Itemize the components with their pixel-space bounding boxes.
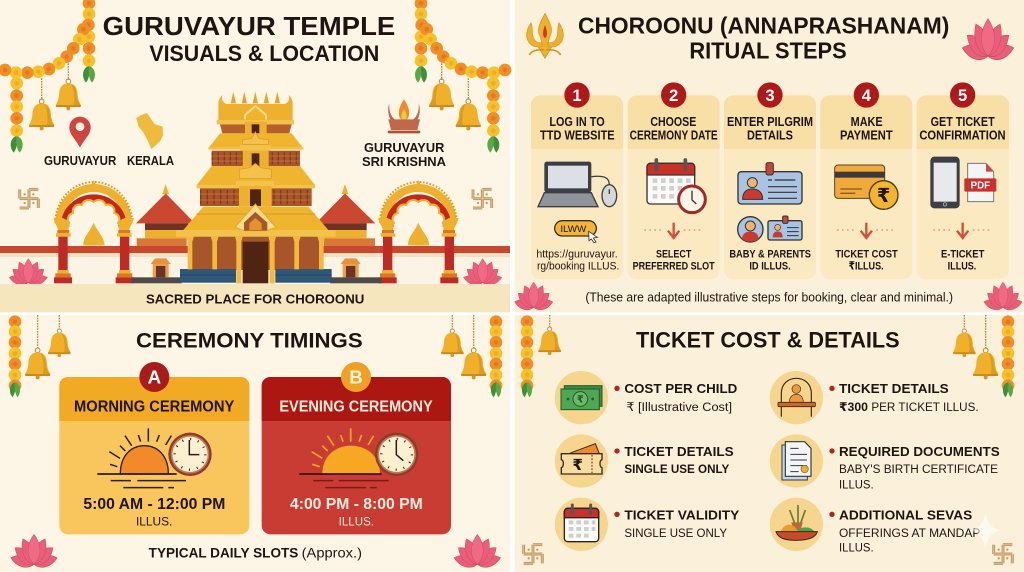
item: cost per child: COST PER CHILD: [624, 381, 738, 396]
icon: credit card with rupee coin: [835, 165, 898, 209]
bells left: [25, 315, 71, 379]
label: Guruvayur Sri Krishna: [362, 141, 446, 169]
label: Guruvayur Sri Krishna: GURUVAYUR: [364, 141, 444, 155]
icon: swastika left: [524, 545, 542, 563]
step card 1: 1: [572, 86, 582, 105]
step card 5: [917, 82, 1009, 279]
side pavilions: [136, 184, 375, 246]
title: TICKET COST & DETAILS: [636, 328, 900, 353]
lotus bottom right: [983, 282, 1023, 312]
panel: ritual steps: [514, 0, 1024, 312]
arch right: [378, 180, 459, 283]
step card 1: LOG IN TO: [549, 115, 605, 129]
icon: calendar with clock: [647, 160, 705, 213]
temple wall band: [0, 246, 510, 284]
icon: swastika right: [994, 545, 1012, 563]
icon: url button: [555, 221, 597, 243]
step card 5: E-TICKET: [941, 248, 984, 260]
lotus right: [463, 259, 503, 287]
label: Guruvayur: GURUVAYUR: [44, 154, 116, 168]
item: cost per child: [555, 371, 738, 424]
item: ticket validity: SINGLE USE ONLY: [624, 526, 727, 540]
title: [103, 11, 395, 66]
step card 1: [531, 82, 623, 279]
step card 3: 3: [765, 86, 775, 105]
arrow: [644, 223, 704, 238]
card: morning ceremony: [59, 362, 249, 534]
title: [578, 12, 949, 64]
card: evening ceremony: EVENING CEREMONY: [279, 399, 433, 416]
item: additional sevas: ILLUS.: [839, 541, 874, 555]
icon: phone and pdf: PDF: [971, 180, 990, 191]
step card 5: ILLUS.: [948, 260, 976, 272]
title: RITUAL STEPS: [689, 38, 847, 64]
caption strip: [0, 284, 510, 312]
icon: baby and parents ids: [738, 216, 802, 242]
caption: TYPICAL DAILY SLOTS: [149, 545, 298, 561]
icon: laptop: [538, 162, 617, 207]
step card 1: https://guruvayur.: [536, 248, 618, 260]
title: GURUVAYUR TEMPLE: [103, 11, 395, 41]
panel: ceremony timings: [0, 315, 510, 572]
label: Kerala: KERALA: [127, 154, 174, 168]
step card 4: TICKET COST: [835, 248, 898, 260]
item: required documents: BABY'S BIRTH CERTIFICATE: [839, 462, 998, 476]
step card 2: SELECT: [656, 248, 691, 260]
lotus left: [8, 259, 48, 287]
step card 5: 5: [958, 86, 967, 105]
caption: (Approx.): [302, 545, 362, 561]
garland left: [521, 315, 533, 397]
step card 5: GET TICKET: [931, 115, 995, 129]
step card 4: 4: [862, 86, 872, 105]
step card 3: ID ILLUS.: [749, 260, 791, 272]
item: ticket details price: [770, 371, 979, 424]
icon: url button: ILWW: [560, 224, 587, 234]
step card 2: CEREMONY DATE: [630, 128, 718, 142]
icon: evening sun and clock: [299, 428, 418, 488]
card: morning ceremony: ILLUS.: [136, 515, 172, 529]
main temple: [176, 92, 336, 283]
item: ticket validity: TICKET VALIDITY: [624, 507, 739, 522]
item: ticket details single use: ₹: [572, 457, 583, 474]
footnote: (These are adapted illustrative steps for booking, clear and minimal.): [585, 291, 953, 305]
card: morning ceremony: 5:00 AM - 12:00 PM: [83, 496, 225, 513]
step card 4: MAKE: [851, 115, 883, 129]
icon: morning sun and clock: [97, 428, 212, 488]
garland left: [9, 315, 21, 397]
lotus top right: [961, 19, 1015, 63]
item: additional sevas: OFFERINGS AT MANDAP: [839, 526, 980, 540]
item: ticket details price: ₹300: [839, 400, 868, 414]
icon: credit card with rupee coin: ₹: [877, 186, 890, 207]
icon: pin centre: [76, 122, 84, 131]
card: morning ceremony: MORNING CEREMONY: [74, 399, 234, 416]
bells left: [29, 63, 81, 130]
step card 3: BABY & PARENTS: [729, 248, 811, 260]
title: CHOROONU (ANNAPRASHANAM): [578, 12, 949, 38]
icon: swastika left: [20, 189, 38, 208]
icon: trishul: [527, 13, 563, 58]
item: cost per child: ₹ [Illustrative Cost]: [626, 400, 732, 414]
card: evening ceremony: ILLUS.: [339, 515, 374, 529]
step card 3: ENTER PILGRIM: [727, 115, 813, 129]
card: morning ceremony: A: [148, 367, 161, 388]
item: additional sevas: [770, 498, 980, 555]
item: ticket details single use: TICKET DETAILS: [624, 444, 734, 459]
step card 4: PAYMENT: [840, 128, 893, 142]
step card 2: [628, 82, 720, 279]
icon: swastika right: [473, 189, 492, 208]
arrow: [933, 223, 993, 238]
item: ticket validity: [555, 498, 739, 551]
step card 3: [724, 82, 816, 279]
icon: Kerala map: [137, 114, 162, 148]
bells right: [953, 315, 998, 379]
step card 2: 2: [669, 86, 678, 105]
lotus left: [10, 534, 58, 570]
item: ticket details price: TICKET DETAILS: [839, 381, 949, 396]
item: ticket details price: PER TICKET ILLUS.: [871, 400, 979, 414]
bells right: [441, 315, 486, 379]
caption strip: SACRED PLACE FOR CHOROONU: [146, 291, 364, 306]
lotus bottom left: [514, 282, 554, 312]
lotus right: [453, 534, 502, 570]
step card 5: CONFIRMATION: [919, 128, 1006, 142]
icon: map pin: [69, 117, 91, 147]
step card 4: [820, 82, 912, 279]
card: evening ceremony: 4:00 PM - 8:00 PM: [290, 496, 423, 513]
item: additional sevas: ADDITIONAL SEVAS: [839, 507, 972, 522]
garland left: [0, 0, 95, 153]
small shrines: [132, 258, 382, 283]
bell left: [538, 315, 561, 355]
item: ticket details single use: SINGLE USE ONLY: [624, 462, 729, 476]
title: VISUALS & LOCATION: [149, 41, 379, 66]
item: cost per child: ₹: [577, 395, 584, 406]
arch left: [53, 180, 134, 283]
item: required documents: REQUIRED DOCUMENTS: [839, 444, 1000, 459]
garland and bells right: [415, 0, 511, 153]
garland right: [490, 315, 502, 397]
step card 4: ₹ILLUS.: [849, 260, 884, 272]
card: evening ceremony: B: [349, 367, 363, 388]
title: CEREMONY TIMINGS: [136, 329, 363, 353]
step card 2: CHOOSE: [650, 115, 696, 129]
arrow: [837, 223, 896, 238]
panel: ticket cost and details: [515, 315, 1024, 572]
garland right: [1002, 315, 1014, 397]
sparkle: [970, 512, 1001, 548]
step card 2: PREFERRED SLOT: [633, 260, 715, 272]
step card 1: TTD WEBSITE: [540, 128, 615, 142]
item: required documents: ILLUS.: [839, 477, 874, 491]
icon: lamp: [388, 99, 420, 133]
step card 3: DETAILS: [747, 128, 793, 142]
step card 1: rg/booking ILLUS.: [537, 260, 619, 272]
icon: phone and pdf: [930, 157, 996, 208]
item: ticket details single use: [555, 434, 734, 488]
label: Guruvayur Sri Krishna: SRI KRISHNA: [362, 155, 446, 169]
panel: temple visuals and location: [0, 0, 511, 312]
icon: id card: [738, 163, 802, 204]
item: required documents: [770, 434, 1000, 491]
card: evening ceremony: [262, 362, 451, 534]
